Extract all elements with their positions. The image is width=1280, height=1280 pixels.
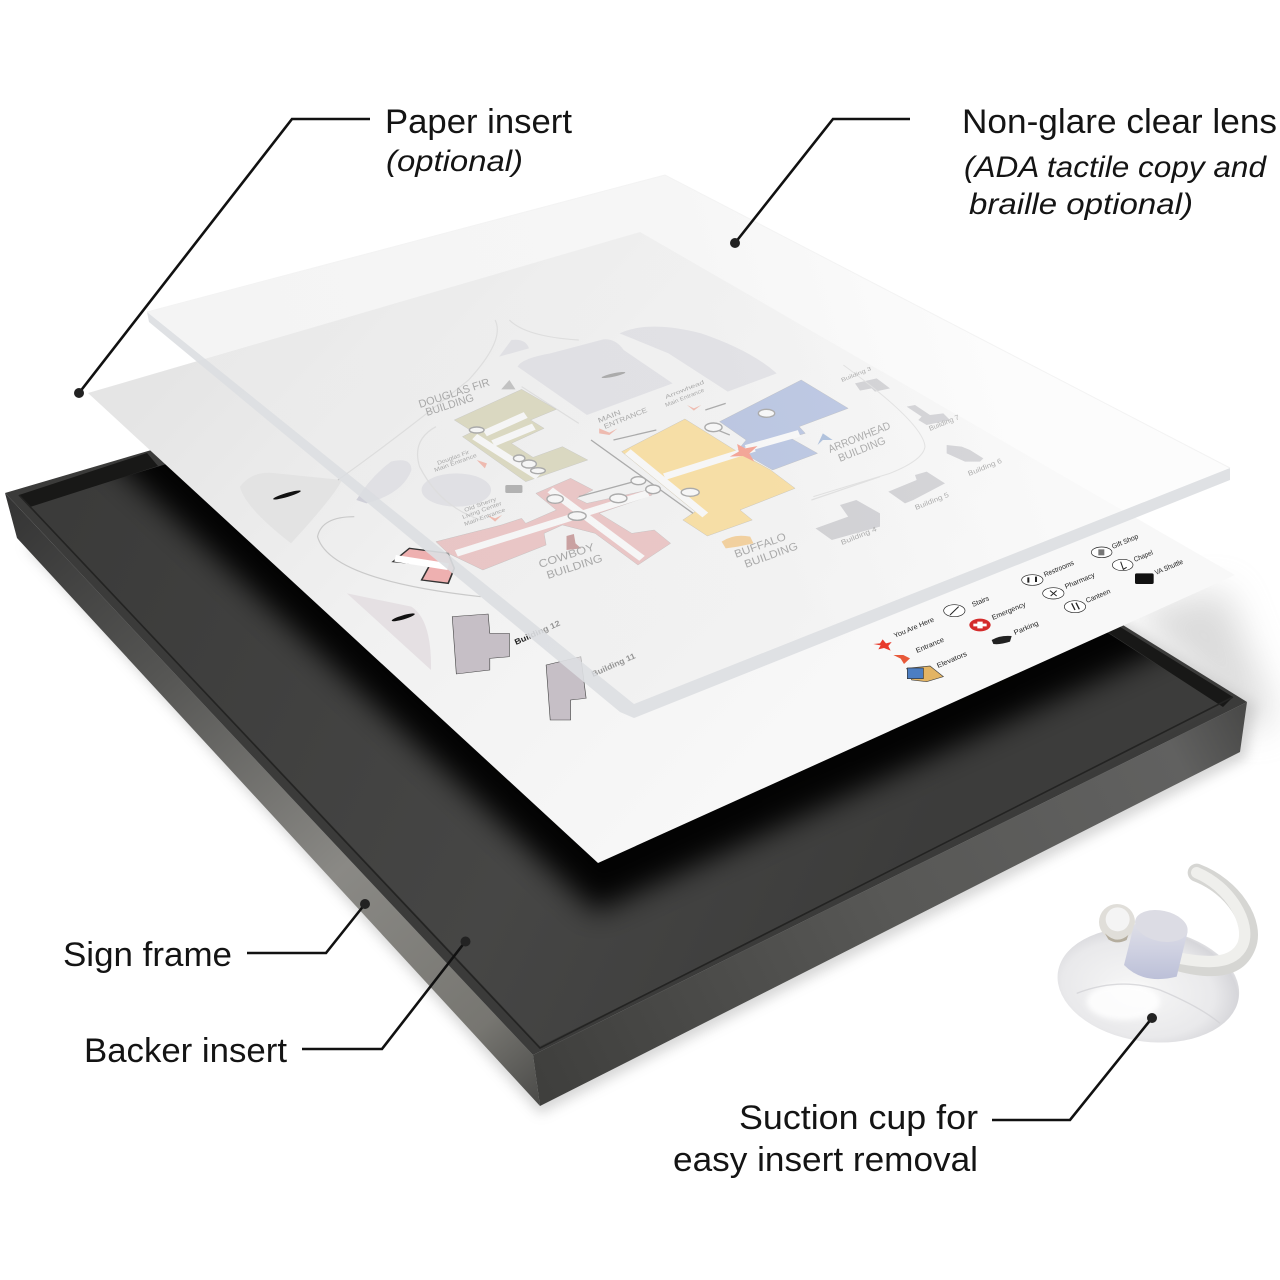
legend star	[873, 639, 892, 651]
map legend: Gift Shop	[1111, 533, 1140, 551]
leader dot	[1147, 1013, 1157, 1023]
building name labels	[417, 377, 892, 582]
leader line	[992, 1018, 1152, 1120]
map legend: Stairs	[971, 595, 991, 609]
cup disk	[1050, 916, 1247, 1054]
entrance labels: Building 6	[967, 458, 1003, 478]
map legend	[893, 533, 1184, 670]
entrance labels: Building 3	[841, 366, 872, 384]
frame inner wall far left	[19, 453, 158, 507]
entrance labels: Building 4	[840, 526, 878, 547]
icon: star you are here	[730, 444, 758, 462]
frame right side	[533, 702, 1247, 1106]
corridors	[395, 415, 799, 567]
map legend: Elevators	[936, 651, 969, 670]
map legend: Entrance	[915, 637, 945, 655]
Cowboy building	[436, 478, 671, 570]
building name labels: ARROWHEAD	[827, 420, 892, 456]
leader line	[247, 904, 365, 953]
labels for buildings 12 and 11	[513, 618, 637, 679]
leader dot	[360, 899, 370, 909]
callout: non-glare clear lens	[730, 103, 1277, 248]
entrance labels: Main Entrance	[434, 453, 478, 474]
map legend: VA Shuttle	[1154, 559, 1184, 577]
legend entrance chevron	[893, 655, 910, 664]
paper shadow on backer	[113, 464, 1160, 922]
label: Backer insert	[84, 1032, 288, 1070]
road lines	[318, 320, 880, 597]
parking area lower	[347, 593, 431, 670]
entrance labels: Douglas Fir	[437, 450, 470, 467]
site map shapes, right part	[813, 365, 1154, 682]
map legend: Emergency	[991, 601, 1027, 622]
Douglas Fir building	[454, 389, 588, 482]
map labels	[417, 366, 1003, 582]
entrance labels: Arrowhead	[665, 380, 705, 401]
entrance labels: Old Sherry	[464, 497, 497, 514]
map legend: Pharmacy	[1064, 572, 1097, 591]
frame rim	[5, 313, 1247, 1055]
building name labels: COWBOY	[537, 541, 597, 571]
ball knob	[1099, 904, 1135, 940]
frame inner wall far right	[1106, 625, 1233, 707]
map legend: Chapel	[1133, 549, 1155, 564]
icon: bus	[505, 485, 522, 493]
Building 4	[816, 500, 880, 540]
leader line	[735, 119, 910, 243]
paper sheet	[88, 232, 1235, 863]
map legend: Canteen	[1085, 588, 1112, 605]
frame left side	[5, 493, 540, 1106]
main parking lots	[356, 327, 777, 507]
entrance labels: MAIN	[597, 409, 622, 425]
parking areas	[240, 473, 342, 543]
soft shadow under the frame	[24, 545, 1275, 1114]
label: Non-glare clear lens	[962, 103, 1277, 141]
outlying buildings	[855, 378, 983, 503]
leader dot	[74, 388, 84, 398]
hook	[1177, 873, 1249, 967]
building name labels: BUILDING	[424, 392, 475, 419]
rim inner line	[19, 495, 1233, 1048]
label: Paper insert	[385, 103, 573, 141]
icon: boot	[567, 534, 581, 550]
labels for buildings 12 and 11: Building 12	[513, 618, 562, 647]
sublabel: (ADA tactile copy and	[964, 151, 1267, 184]
map circle icons	[469, 409, 775, 520]
paper insert	[88, 232, 1235, 863]
lens edge	[147, 312, 1230, 718]
labels for buildings 12 and 11: Building 11	[590, 651, 637, 679]
map legend: You Are Here	[893, 617, 935, 640]
label line two: easy insert removal	[673, 1141, 978, 1179]
disk highlight	[1087, 983, 1160, 1020]
building name labels: BUFFALO	[733, 531, 788, 561]
callout: backer insert	[84, 936, 470, 1070]
sublabel line two: braille optional)	[969, 188, 1193, 221]
legend elevators	[907, 666, 943, 682]
cylinder post	[1124, 916, 1188, 979]
building name labels: BUILDING	[743, 540, 800, 571]
map legend: Restrooms	[1043, 560, 1076, 579]
icon: arrowhead	[818, 433, 833, 445]
label: Sign frame	[63, 936, 232, 974]
sublabel: (optional)	[386, 145, 523, 178]
backer insert surface	[30, 325, 1223, 1046]
leader line	[79, 119, 370, 393]
callout: suction cup	[673, 1013, 1157, 1179]
sign frame	[5, 450, 1247, 1106]
knob highlight	[1106, 907, 1130, 931]
icon: buffalo	[722, 536, 753, 548]
callout: paper insert	[74, 103, 573, 398]
entrance labels: ENTRANCE	[603, 407, 649, 431]
entrance labels: Living Center	[462, 501, 503, 521]
entrance labels: Main Entrance	[665, 388, 705, 409]
thin connector lines	[579, 403, 730, 513]
Buffalo building	[622, 419, 795, 536]
car icons	[272, 371, 626, 623]
site map shapes, left part	[240, 320, 880, 720]
disk ridge	[1077, 984, 1220, 1023]
entrance chevrons	[477, 405, 701, 522]
callout: sign frame	[63, 899, 370, 974]
non-glare clear lens	[147, 175, 1230, 718]
building name labels: BUILDING	[837, 435, 887, 465]
icon: tree	[501, 380, 516, 389]
entrance labels: Main Entrance	[464, 507, 506, 528]
suction cup	[1050, 873, 1249, 1054]
entrance labels: Building 5	[914, 492, 950, 512]
knob base shadow	[1105, 933, 1128, 942]
Arrowhead building	[720, 380, 848, 470]
lens face	[147, 175, 1230, 704]
entrance labels: Building 7	[928, 414, 961, 433]
leader dot	[730, 238, 740, 248]
building 11 shape	[546, 657, 586, 720]
leader dot	[460, 936, 470, 946]
building name labels: DOUGLAS FIR	[417, 377, 491, 411]
campus road	[813, 365, 925, 497]
lens top highlight	[147, 175, 1230, 468]
map legend: Parking	[1013, 620, 1040, 637]
leader line	[302, 942, 465, 1049]
cylinder top	[1132, 905, 1191, 947]
entrance labels	[434, 366, 1003, 547]
Cowboy wing outside lens	[393, 548, 454, 583]
label line one: Suction cup for	[739, 1099, 978, 1137]
legend circle icons	[944, 547, 1154, 644]
building name labels: BUILDING	[545, 553, 604, 582]
buildings 12 and 11	[452, 614, 509, 674]
